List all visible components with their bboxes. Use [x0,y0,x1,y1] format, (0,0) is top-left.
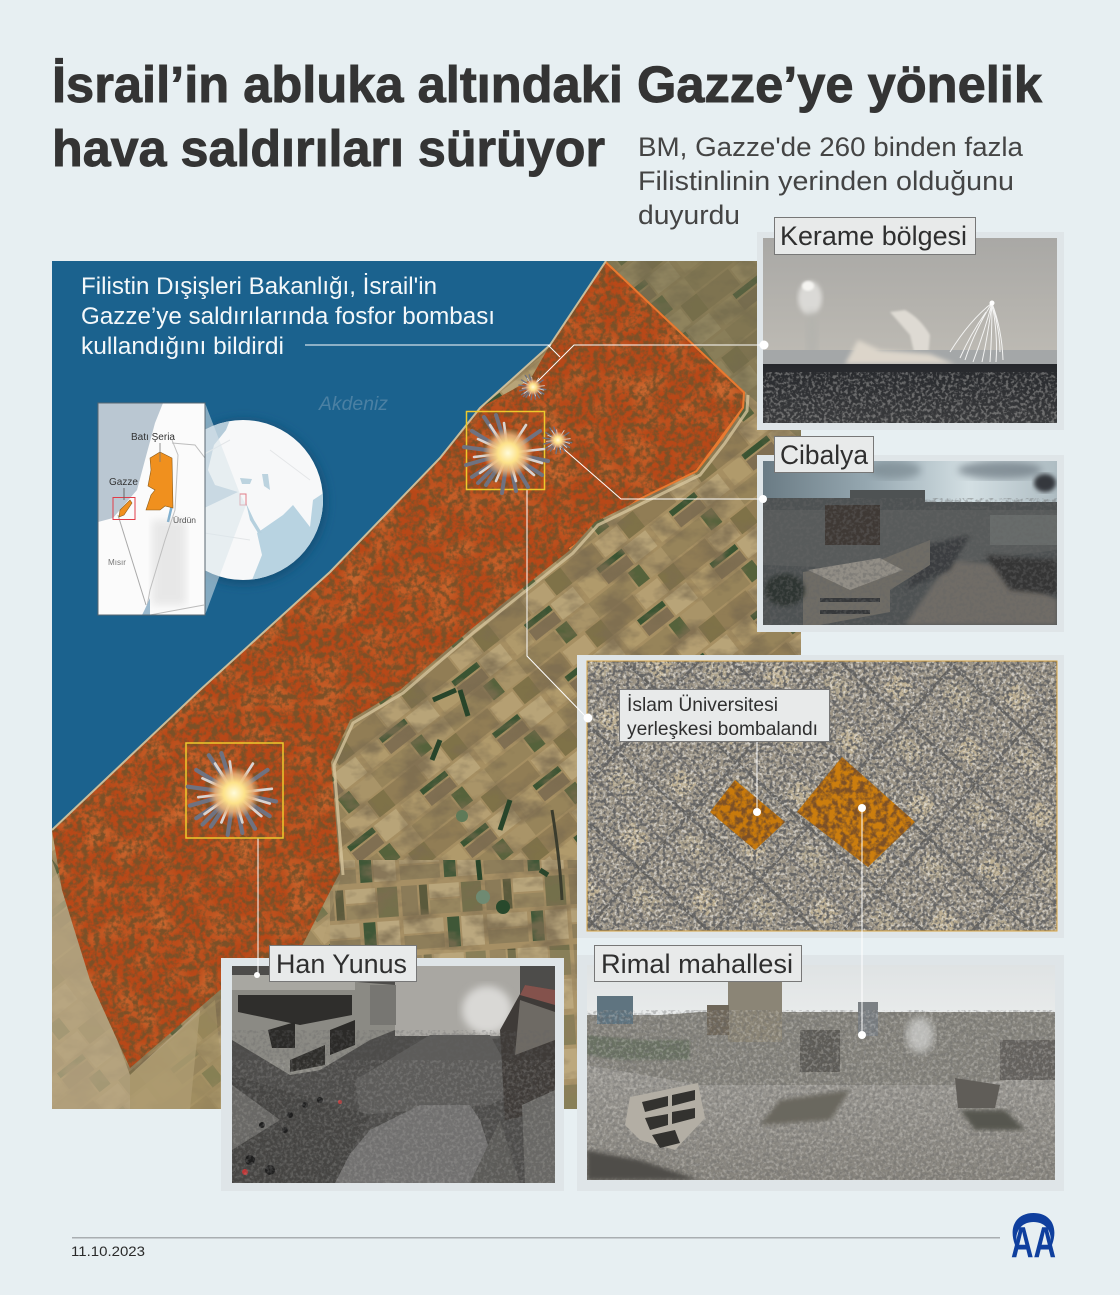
highlight box north [466,412,544,490]
subtitle: duyurdu [638,200,740,230]
right building [500,985,555,1120]
map sea [52,261,606,830]
text block: phosphorus bomb statement: Gazze’ye saldırılarında fosfor bombası [81,303,495,330]
map Gaza strip highlighted in orange [52,261,752,1071]
icon: AA logo [1011,1213,1056,1267]
connector lines [258,345,862,1035]
photo: Kerame [757,232,1064,430]
globe oceans [252,494,323,580]
text block: phosphorus bomb statement: Filistin Dışişleri Bakanlığı, İsrail'in [81,273,437,300]
photo: Rimal neighbourhood [577,955,1064,1191]
inset labels: Mısır [108,558,126,567]
highlight box south [186,743,283,838]
label: Cibalya: Cibalya [780,440,869,470]
title: hava saldırıları sürüyor [52,120,605,177]
inset highlight box [113,498,135,520]
label: İslam Üniversitesi: yerleşkesi bombalandı [627,718,818,740]
fallen slabs [335,1105,500,1183]
sea label: Akdeniz: Akdeniz [318,394,388,415]
irrigated field circles [456,810,468,822]
photo: satellite view of Islamic University campus [577,655,1064,938]
label: Rimal mahallesi: Rimal mahallesi [601,949,793,979]
background haze [395,966,520,1036]
title: İsrail’in abluka altındaki Gazze’ye yönelik [52,56,1043,113]
icon: AA logo: AA [1011,1218,1056,1267]
foreground building [803,540,930,625]
subtitle: Filistinlinin yerinden olduğunu [638,166,1014,196]
left building [232,975,395,1075]
inset West Bank [146,452,173,510]
inset Gaza [119,500,132,517]
photo: Han Yunus [221,958,564,1191]
ruined building [625,1083,705,1150]
inset labels: Batı Şeria [131,432,175,443]
inset map panel [98,403,205,615]
inset labels: Gazze [109,476,138,488]
highlighted campus block left [710,780,785,850]
icon: small explosion [519,375,546,400]
highlighted campus block right [797,757,915,867]
text block: phosphorus bomb statement [81,273,495,360]
icon: explosion north [464,415,548,493]
date: 11.10.2023 [71,1243,145,1259]
subtitle [638,132,1024,230]
inset sea [98,403,163,522]
map land [52,261,801,1109]
subtitle: BM, Gazze'de 260 binden fazla [638,132,1024,162]
label: İslam Üniversitesi: İslam Üniversitesi [627,693,778,716]
label: Han Yunus: Han Yunus [276,949,407,979]
rubble [905,560,1057,625]
rubble pile [355,1035,504,1114]
satellite map of Gaza and surroundings [52,261,801,1109]
text block: phosphorus bomb statement: kullandığını bildirdi [81,333,284,360]
photo: Cibalya [757,455,1064,632]
locator wedge [205,403,246,615]
icon: explosion south [188,753,276,835]
street with people [257,1082,368,1183]
label: Kerame bölgesi: Kerame bölgesi [780,221,967,251]
icon: small explosion east [543,427,572,454]
icon: globe locator [206,418,328,586]
footer rule [72,1237,1000,1238]
title [52,56,1043,177]
inset labels [108,432,196,567]
connector dots [254,340,866,1039]
inset labels: Ürdün [173,515,196,525]
label: İslam Üniversitesi [620,690,830,742]
